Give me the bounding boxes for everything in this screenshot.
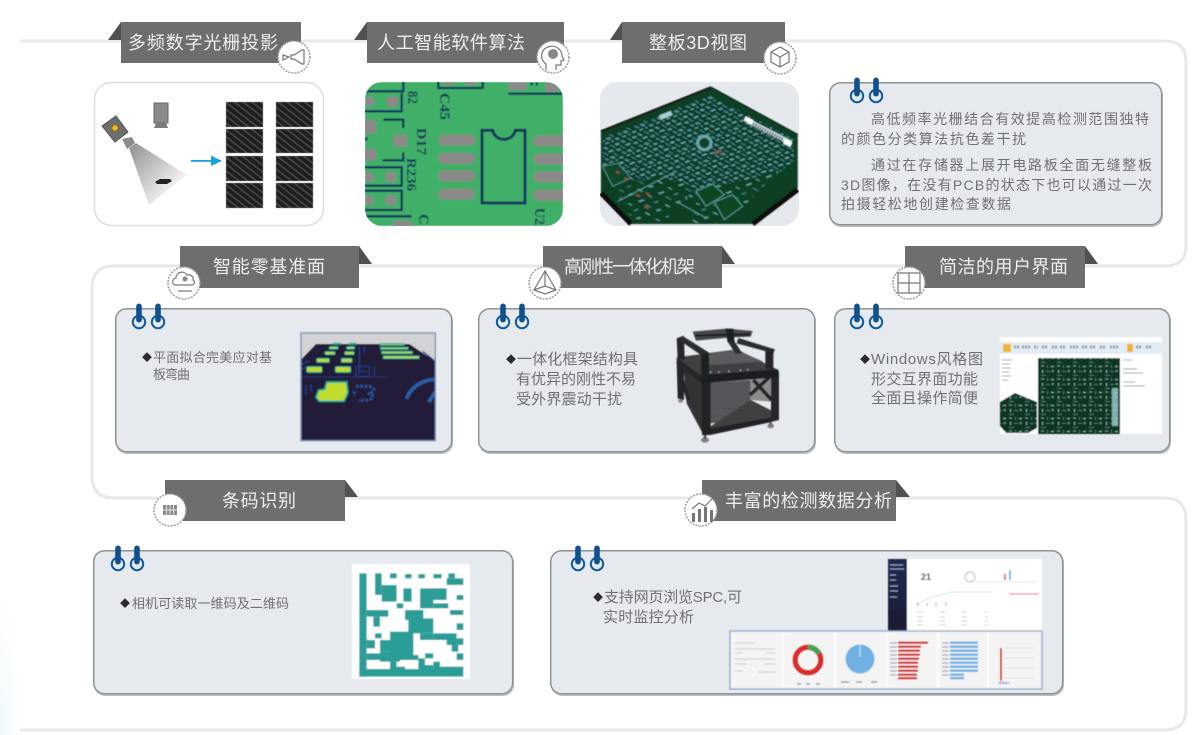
text block: ◆ — [142, 352, 152, 364]
text block: 全面且操作简便 — [871, 389, 978, 407]
icon: binder rings — [112, 546, 143, 570]
text block: ◆ — [506, 354, 516, 366]
grating images — [226, 102, 313, 208]
text block: 板弯曲 — [153, 367, 190, 382]
text block — [841, 111, 1152, 212]
heading: 整板3D视图: 整板3D视图 — [649, 33, 747, 53]
image: machine frame — [677, 329, 779, 443]
icon: camera — [154, 103, 168, 128]
text block: 一体化框架结构具 — [517, 351, 638, 368]
icon: binder rings — [133, 304, 164, 328]
text block: ◆ — [120, 598, 130, 610]
text block — [142, 350, 272, 382]
panel: rigid frame — [479, 304, 816, 454]
icon: binder rings — [851, 304, 882, 328]
image: web dashboard — [730, 559, 1042, 689]
text block — [506, 351, 638, 408]
image: height map — [301, 333, 435, 441]
text block: 实时监控分析 — [603, 609, 694, 626]
heading: 条码识别 — [154, 480, 358, 526]
text block: 3D图像，在没有PCB的状态下也可以通过一次 — [841, 177, 1152, 193]
panel: green PCB close-up: U2 — [531, 208, 547, 225]
text block: 受外界震动干扰 — [516, 391, 622, 408]
heading: 丰富的检测数据分析: 丰富的检测数据分析 — [725, 491, 892, 511]
heading: 智能零基准面: 智能零基准面 — [213, 257, 325, 277]
image: software screenshot — [1000, 337, 1162, 434]
text block: Windows风格图 — [871, 351, 983, 368]
heading: 整板3D视图 — [610, 22, 796, 74]
panel: grating projection diagram — [94, 82, 324, 226]
panel: green PCB close-up: C45 — [436, 93, 452, 120]
text block: 平面拟合完美应对基 — [153, 350, 272, 365]
text block: 的颜色分类算法抗色差干扰 — [841, 131, 1026, 147]
text block: 形交互界面功能 — [871, 370, 978, 388]
text block: 高低频率光栅结合有效提高检测范围独特 — [871, 111, 1149, 127]
heading: 多频数字光栅投影 — [108, 22, 310, 73]
panel: green PCB close-up — [363, 80, 567, 227]
heading: 人工智能软件算法: 人工智能软件算法 — [377, 33, 525, 53]
heading: 高刚性一体化机架 — [529, 246, 735, 299]
heading: 简洁的用户界面: 简洁的用户界面 — [939, 257, 1068, 277]
heading: 丰富的检测数据分析 — [685, 480, 910, 526]
icon: binder rings — [497, 304, 528, 328]
panel: green PCB close-up: C — [415, 214, 431, 225]
panel: green PCB close-up: D17 — [413, 128, 428, 155]
icon: binder rings — [851, 78, 882, 102]
panel: data analysis — [551, 546, 1064, 696]
heading: 条码识别: 条码识别 — [222, 491, 296, 511]
image: web dashboard: 21 — [921, 572, 931, 582]
text block: 拍摄轻松地创建检查数据 — [841, 196, 1011, 212]
text block: 通过在存储器上展开电路板全面无缝整板 — [871, 157, 1152, 173]
arrow — [191, 156, 222, 166]
icon: projector with light beam — [102, 116, 187, 205]
text block — [860, 351, 983, 407]
text block: 支持网页浏览SPC,可 — [604, 589, 742, 606]
heading: 智能零基准面 — [168, 246, 372, 299]
heading: 人工智能软件算法 — [354, 22, 569, 73]
image: data matrix code — [352, 564, 470, 679]
panel: green PCB close-up: R236 — [403, 158, 418, 191]
panel: barcode reading — [94, 546, 514, 696]
heading: 高刚性一体化机架: 高刚性一体化机架 — [564, 257, 695, 277]
panel: user interface — [835, 304, 1171, 454]
heading: 多频数字光栅投影: 多频数字光栅投影 — [128, 33, 278, 53]
icon: binder rings — [572, 546, 603, 570]
panel: 3D PCB view — [600, 82, 799, 226]
text block: 相机可读取一维码及二维码 — [132, 596, 289, 611]
heading: 简洁的用户界面 — [893, 246, 1098, 299]
panel: green PCB close-up: 82 — [404, 91, 420, 104]
text block: ◆ — [860, 354, 870, 366]
text block: 有优异的刚性不易 — [516, 371, 636, 388]
panel: description text card — [830, 78, 1163, 227]
panel: zero reference plane — [116, 304, 453, 454]
text block — [593, 589, 742, 626]
text block: ◆ — [593, 592, 603, 604]
